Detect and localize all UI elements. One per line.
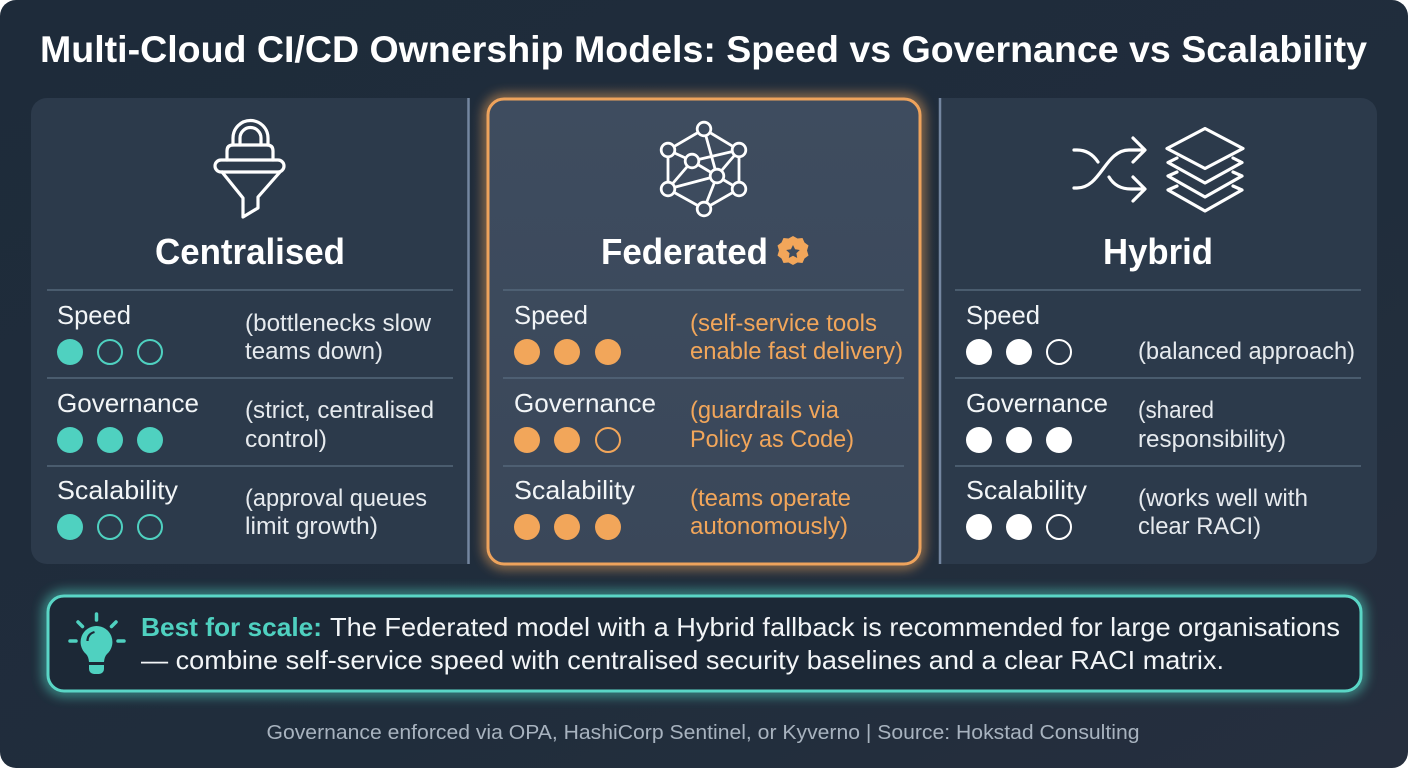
row: scalability: (teams operate bbox=[690, 485, 851, 512]
callout: best for scale: — combine self-service speed with centralised security baselines and a clear RACI matrix. bbox=[141, 645, 1224, 675]
panel: federated bbox=[488, 99, 920, 564]
row: governance: (shared bbox=[1138, 397, 1214, 424]
row: speed: enable fast delivery) bbox=[690, 338, 903, 365]
row: governance: (strict, centralised bbox=[245, 397, 434, 424]
row: scalability bbox=[57, 475, 427, 540]
row: governance: responsibility) bbox=[1138, 426, 1286, 453]
row: governance: Governance bbox=[514, 388, 656, 418]
callout: best for scale: The Federated model with a Hybrid fallback is recommended for large organisations bbox=[330, 612, 1340, 642]
row: speed bbox=[57, 300, 432, 365]
panel: centralised bbox=[31, 98, 468, 564]
row: scalability: Scalability bbox=[514, 475, 635, 505]
row: scalability: Scalability bbox=[57, 475, 178, 505]
row: scalability: clear RACI) bbox=[1138, 513, 1261, 540]
row: scalability: limit growth) bbox=[245, 513, 378, 540]
row: governance: Governance bbox=[966, 388, 1108, 418]
row: speed: (bottlenecks slow bbox=[245, 310, 432, 337]
title: Multi-Cloud CI/CD Ownership Models: Speed vs Governance vs Scalability bbox=[40, 29, 1367, 70]
heading: Federated: Federated bbox=[601, 231, 768, 272]
icon: shuffle and layers bbox=[1074, 128, 1243, 211]
heading: Centralised: Centralised bbox=[155, 231, 345, 272]
icon: padlock funnel bbox=[215, 121, 284, 217]
row: speed bbox=[514, 300, 903, 365]
row: scalability: Scalability bbox=[966, 475, 1087, 505]
row: scalability bbox=[514, 475, 851, 540]
row: scalability: (approval queues bbox=[245, 485, 427, 512]
callout text: Best for scale: bbox=[141, 612, 322, 642]
icon: star badge bbox=[778, 236, 808, 265]
footer source note: Governance enforced via OPA, HashiCorp Sentinel, or Kyverno | Source: Hokstad Consulting bbox=[266, 722, 1140, 744]
row: speed: Speed bbox=[966, 300, 1040, 330]
row: speed: Speed bbox=[57, 300, 131, 330]
row: governance: control) bbox=[245, 426, 327, 453]
row: speed bbox=[966, 300, 1355, 365]
row: speed: teams down) bbox=[245, 338, 383, 365]
heading: Hybrid: Hybrid bbox=[1103, 231, 1213, 272]
row: scalability: (works well with bbox=[1138, 485, 1308, 512]
row: scalability bbox=[966, 475, 1308, 540]
row: governance: Policy as Code) bbox=[690, 426, 854, 453]
row: speed: Speed bbox=[514, 300, 588, 330]
row: speed: (balanced approach) bbox=[1138, 338, 1355, 365]
icon: network bbox=[661, 122, 746, 216]
panel: hybrid bbox=[940, 98, 1377, 564]
row: scalability: autonomously) bbox=[690, 513, 848, 540]
icon: lightbulb bbox=[70, 614, 124, 674]
row: speed: (self-service tools bbox=[690, 310, 877, 337]
row: governance bbox=[514, 388, 854, 453]
row: governance bbox=[57, 388, 434, 453]
row: governance: (guardrails via bbox=[690, 397, 840, 424]
row: governance bbox=[966, 388, 1286, 453]
row: governance: Governance bbox=[57, 388, 199, 418]
callout: best for scale bbox=[48, 596, 1361, 691]
